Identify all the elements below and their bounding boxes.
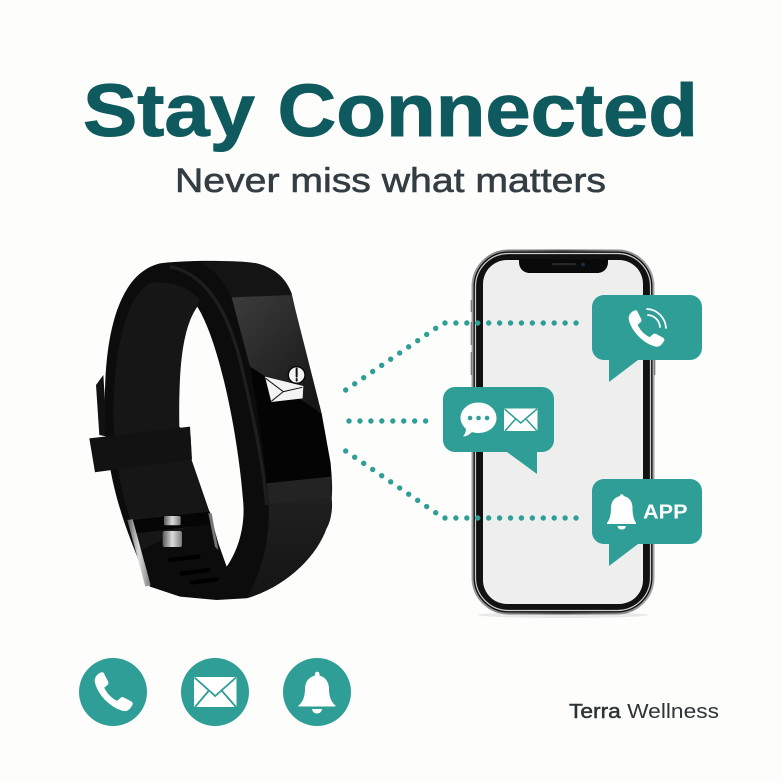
front bevel highlight xyxy=(170,267,267,505)
glossy screen xyxy=(232,295,322,413)
footer bell badge xyxy=(283,658,351,726)
alert mark xyxy=(294,369,300,381)
band top section xyxy=(200,261,292,297)
buckle frame xyxy=(127,519,151,587)
dotted connectors xyxy=(346,323,577,518)
screen xyxy=(483,260,643,604)
envelope folds xyxy=(266,378,302,401)
footer mail badge xyxy=(181,658,249,726)
lower gloss strip xyxy=(267,477,332,504)
bubble shape xyxy=(443,387,554,474)
bubble shape xyxy=(592,479,702,566)
phone shadow xyxy=(478,612,648,618)
app alert bubble xyxy=(592,479,702,566)
lower connector xyxy=(346,451,436,513)
strap holes xyxy=(170,557,217,583)
buckle pin upper xyxy=(164,516,181,525)
notch xyxy=(519,259,608,273)
chat icon xyxy=(460,402,496,436)
phone frame xyxy=(472,250,654,614)
textured lower band xyxy=(247,498,332,598)
fitness band xyxy=(89,261,332,600)
buckle pin lower xyxy=(163,531,182,547)
black screen area xyxy=(250,367,332,483)
badge circle xyxy=(283,658,351,726)
envelope xyxy=(265,377,303,402)
side buttons xyxy=(472,300,654,375)
chat dots xyxy=(470,416,487,420)
app label: APP xyxy=(643,502,688,524)
handset xyxy=(95,672,133,711)
badge circle xyxy=(181,658,249,726)
bubble shape xyxy=(592,295,702,382)
bell xyxy=(298,672,336,714)
footer phone badge xyxy=(79,658,147,726)
buckle side xyxy=(208,513,218,550)
band opening xyxy=(179,307,244,567)
lower horizontal connector xyxy=(445,515,577,521)
title: Stay Connected xyxy=(83,69,698,152)
brand name: Terra Wellness xyxy=(569,700,719,723)
inner strap shading xyxy=(113,282,210,550)
alert badge xyxy=(288,367,305,383)
badge circle xyxy=(79,658,147,726)
frame inner highlight xyxy=(476,254,650,610)
signal arcs xyxy=(647,309,666,328)
envelope lines xyxy=(504,409,537,431)
upper connector xyxy=(346,328,436,390)
bell icon xyxy=(607,494,636,530)
notification icon on band xyxy=(265,367,305,402)
call bubble xyxy=(592,295,702,382)
buckle bar xyxy=(133,512,212,533)
strap keeper xyxy=(89,427,192,472)
middle connector xyxy=(349,418,427,424)
phone icon xyxy=(629,310,664,347)
message bubble xyxy=(443,387,554,474)
envelope icon xyxy=(504,408,538,431)
envelope body xyxy=(504,408,538,431)
speaker xyxy=(552,263,576,265)
upper horizontal connector xyxy=(445,320,577,326)
subtitle: Never miss what matters xyxy=(175,162,606,200)
band rear clip xyxy=(96,375,107,437)
smartphone xyxy=(472,250,654,618)
envelope lines xyxy=(194,678,236,707)
envelope body xyxy=(194,677,236,707)
chat balloon xyxy=(460,402,496,436)
band body xyxy=(105,261,332,600)
camera xyxy=(581,262,585,266)
